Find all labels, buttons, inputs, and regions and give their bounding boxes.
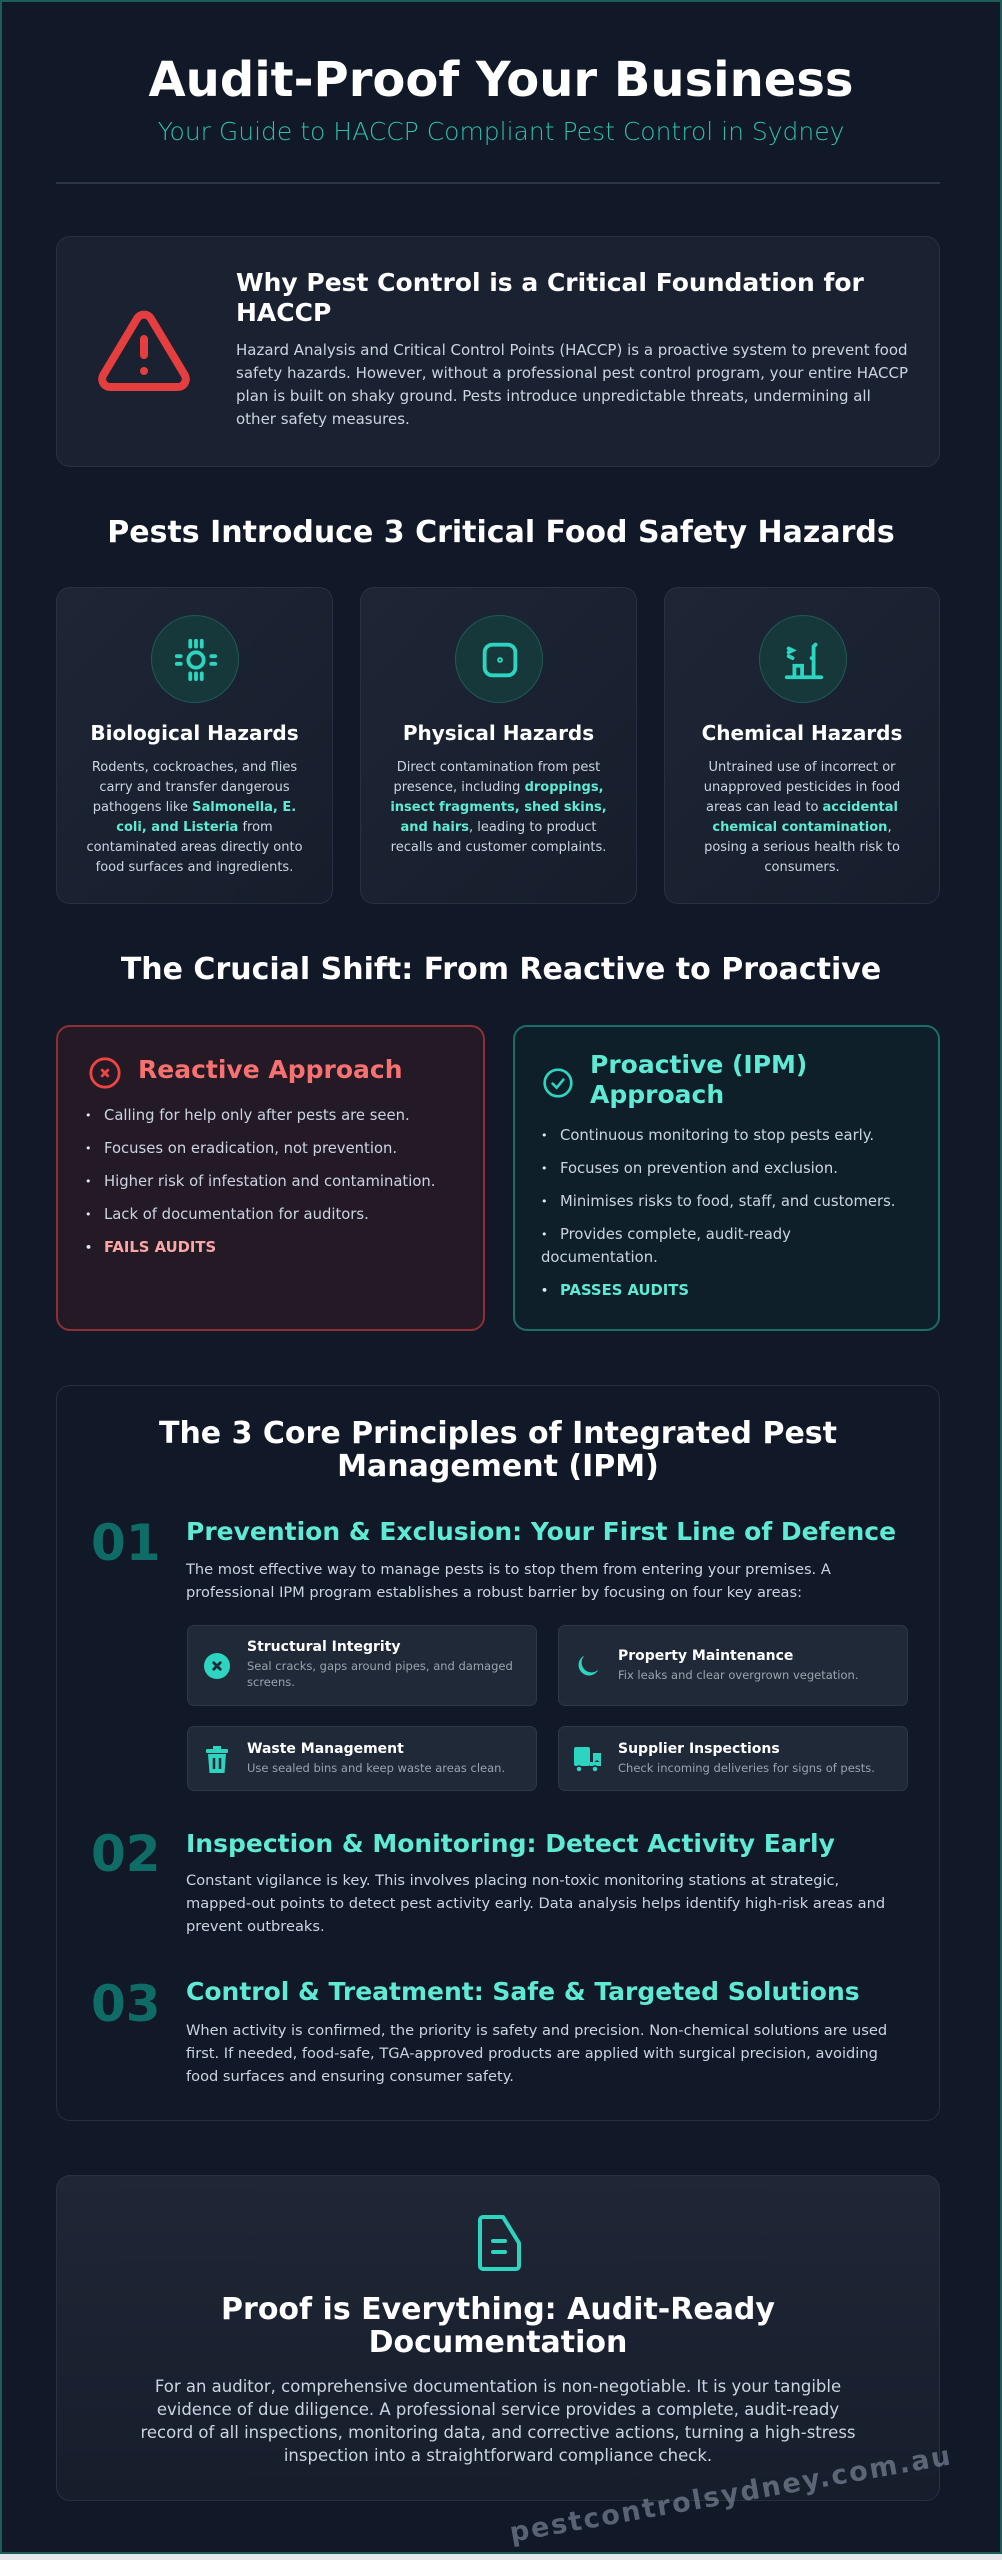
list: proactive points [541, 1127, 896, 1299]
panel: why pest control [56, 236, 940, 467]
list: proactive points: Continuous monitoring to stop pests early. [560, 1127, 874, 1144]
list: proactive points: Provides complete, audit-ready [560, 1226, 791, 1243]
icon: bug [151, 615, 239, 703]
text: biological: carry and transfer dangerous [99, 780, 290, 795]
panel: IPM principles [56, 1385, 940, 2121]
list: reactive points: FAILS AUDITS [104, 1239, 216, 1256]
heading 02: Inspection & Monitoring: Detect Activity Early [186, 1829, 835, 1858]
text: physical: presence, including droppings, [393, 780, 604, 795]
text: chemical: Untrained use of incorrect or [708, 760, 896, 775]
text: proof: evidence of due diligence. A professional service provides a complete, audit-ready [157, 2400, 839, 2419]
card: property maintenance [558, 1625, 908, 1706]
heading: proactive: Approach [590, 1080, 724, 1109]
heading: biological: Biological Hazards [90, 721, 299, 745]
heading: reactive: Reactive Approach [138, 1055, 403, 1084]
card: structural integrity [187, 1625, 537, 1706]
card: supplier inspections: Check incoming deliveries for signs of pests. [618, 1761, 875, 1775]
heading: proof [221, 2292, 775, 2360]
card: supplier inspections [558, 1726, 908, 1791]
text: chemical: consumers. [764, 860, 840, 875]
principle 02 [91, 1825, 885, 1935]
text: proof: For an auditor, comprehensive documentation is non-negotiable. It is your tangible [155, 2377, 841, 2396]
heading: why pest control: HACCP [236, 298, 331, 327]
text: proof: inspection into a straightforward compliance check. [284, 2446, 712, 2465]
watermark: pestcontrolsydney.com.au [507, 2440, 955, 2549]
icon: chemical [759, 615, 847, 703]
heading: why pest control [236, 268, 864, 327]
heading: physical: Physical Hazards [403, 721, 594, 745]
text: proof [140, 2377, 856, 2465]
heading: crucial shift: The Crucial Shift: From Reactive to Proactive [121, 952, 881, 987]
heading: proactive: Proactive (IPM) [590, 1050, 807, 1079]
heading: IPM: The 3 Core Principles of Integrated Pest [159, 1416, 837, 1451]
card: structural integrity: Structural Integrity [247, 1639, 401, 1655]
list: proactive points: documentation. [541, 1249, 658, 1266]
panel: biological hazards [56, 587, 333, 904]
title: Audit-Proof Your Business [149, 52, 853, 108]
text 03: food surfaces and ensuring consumer safety. [186, 2068, 514, 2085]
icon: x badge [204, 1653, 230, 1679]
icon: truck [574, 1747, 601, 1772]
text 02: prevent outbreaks. [186, 1918, 325, 1935]
principle 03 [91, 1975, 887, 2085]
number 02: 02 [91, 1825, 161, 1883]
text: biological: food surfaces and ingredients. [96, 860, 293, 875]
icon: document [478, 2215, 521, 2271]
text: biological: Rodents, cockroaches, and flies [92, 760, 297, 775]
panel: reactive approach [56, 1025, 485, 1331]
heading: proof: Documentation [369, 2325, 627, 2360]
heading: why pest control: Why Pest Control is a Critical Foundation for [236, 268, 864, 297]
card: waste management: Waste Management [247, 1741, 404, 1757]
text: HACCP description: plan is built on shaky ground. Pests introduce unpredictable threats, undermining all [236, 387, 871, 405]
panel: documentation [56, 2175, 940, 2501]
text: chemical: posing a serious health risk to [704, 840, 900, 855]
text 01: The most effective way to manage pests is to stop them from entering your premises. A [186, 1561, 831, 1578]
icon: warning triangle [98, 310, 190, 391]
icon: square [455, 615, 543, 703]
heading: chemical: Chemical Hazards [702, 721, 902, 745]
list: reactive points: Higher risk of infestation and contamination. [104, 1173, 435, 1190]
card: structural integrity: screens. [247, 1675, 295, 1689]
panel: physical hazards [360, 587, 637, 904]
text: chemical: unapproved pesticides in food [704, 780, 900, 795]
subtitle: Your Guide to HACCP Compliant Pest Control in Sydney [158, 117, 844, 146]
card: property maintenance: Property Maintenance [618, 1648, 793, 1664]
card: supplier inspections: Supplier Inspections [618, 1741, 780, 1757]
text: physical: Direct contamination from pest [397, 760, 600, 775]
text: HACCP description [236, 341, 908, 428]
text: biological: coli, and Listeria from [116, 820, 273, 835]
heading 01: Prevention & Exclusion: Your First Line of Defence [186, 1517, 896, 1546]
heading: IPM: Management (IPM) [337, 1449, 659, 1484]
principle 01 [91, 1514, 908, 1791]
text: biological: contaminated areas directly onto [86, 840, 303, 855]
text: physical [390, 760, 607, 855]
card: structural integrity: Seal cracks, gaps around pipes, and damaged [247, 1659, 513, 1673]
card: property maintenance: Fix leaks and clear overgrown vegetation. [618, 1668, 858, 1682]
heading: hazards: Pests Introduce 3 Critical Food Safety Hazards [107, 515, 895, 550]
text: proof: record of all inspections, monitoring data, and corrective actions, turning a high-stress [140, 2423, 856, 2442]
card: waste management: Use sealed bins and keep waste areas clean. [247, 1761, 505, 1775]
text 01: professional IPM program establishes a robust barrier by focusing on four key areas: [186, 1584, 802, 1601]
text: chemical [704, 760, 900, 875]
heading: proof: Proof is Everything: Audit-Ready [221, 2292, 775, 2327]
text: physical: and hairs, leading to product [400, 820, 596, 835]
icon: check circle [543, 1068, 573, 1098]
text: HACCP description: safety hazards. However, without a professional pest control program, your entire HACCP [236, 364, 908, 382]
heading: IPM [159, 1416, 837, 1484]
text 01 [186, 1561, 831, 1601]
text: HACCP description: other safety measures. [236, 410, 410, 428]
card: waste management [187, 1726, 537, 1791]
text 03 [186, 2022, 887, 2085]
panel: proactive approach [513, 1025, 940, 1331]
text 03: When activity is confirmed, the priority is safety and precision. Non-chemical solutions are used [186, 2022, 887, 2039]
list: reactive points: Calling for help only after pests are seen. [104, 1107, 410, 1124]
panel: chemical hazards [664, 587, 940, 904]
icon: moon [578, 1656, 598, 1676]
list: proactive points: Minimises risks to food, staff, and customers. [560, 1193, 896, 1210]
text: chemical: areas can lead to accidental [706, 800, 898, 815]
text 02 [186, 1872, 885, 1935]
list: proactive points: Focuses on prevention and exclusion. [560, 1160, 838, 1177]
icon: bin [206, 1746, 228, 1773]
heading 03: Control & Treatment: Safe & Targeted Solutions [186, 1977, 860, 2006]
list: reactive points: Lack of documentation for auditors. [104, 1206, 369, 1223]
icon: x circle [89, 1057, 121, 1089]
text: biological [86, 760, 303, 875]
list: proactive points: PASSES AUDITS [560, 1282, 689, 1299]
list: reactive points [86, 1107, 435, 1256]
text: biological: pathogens like Salmonella, E. [93, 800, 296, 815]
text 02: Constant vigilance is key. This involves placing non-toxic monitoring stations at strategic, [186, 1872, 839, 1889]
number 01: 01 [91, 1514, 161, 1572]
list: reactive points: Focuses on eradication, not prevention. [104, 1140, 397, 1157]
text 03: first. If needed, food-safe, TGA-approved products are applied with surgical precision, avoiding [186, 2045, 878, 2062]
text: physical: insect fragments, shed skins, [390, 800, 607, 815]
number 03: 03 [91, 1975, 161, 2033]
text: HACCP description: Hazard Analysis and Critical Control Points (HACCP) is a proactive system to prevent food [236, 341, 908, 359]
heading: proactive [590, 1050, 807, 1109]
text: chemical: chemical contamination, [712, 820, 892, 835]
text 02: mapped-out points to detect pest activity early. Data analysis helps identify high-risk areas and [186, 1895, 885, 1912]
text: physical: recalls and customer complaints. [391, 840, 606, 855]
